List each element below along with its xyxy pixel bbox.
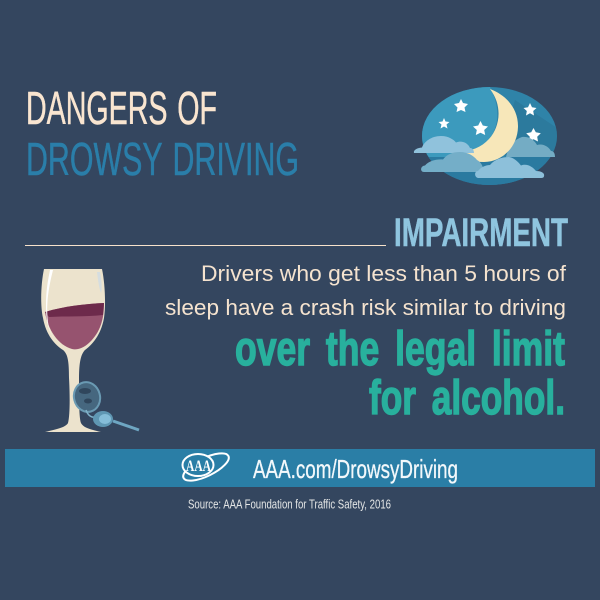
infographic canvas (5, 87, 595, 511)
icon: moon and clouds (414, 87, 562, 187)
logo: AAA (180, 448, 232, 486)
title: DROWSY DRIVING (26, 133, 299, 185)
cloud right (506, 137, 555, 157)
banner (5, 449, 595, 487)
banner url: AAA.com/DrowsyDriving (253, 454, 458, 484)
icon: car keys (71, 379, 139, 430)
cloud front (475, 157, 544, 178)
wine (45, 303, 104, 349)
text block: sleep statement: Drivers who get less than 5 hours of (201, 261, 567, 286)
title: DANGERS OF (26, 82, 217, 134)
crescent moon (453, 89, 518, 162)
night sky (422, 87, 557, 185)
icon: wine glass (41, 269, 139, 432)
title (26, 82, 299, 185)
text block: sleep statement (165, 261, 567, 320)
stars (438, 99, 541, 142)
highlight (46, 270, 54, 338)
logo: AAA: AAA (186, 458, 211, 475)
cloud left (414, 136, 474, 153)
divider line (25, 245, 386, 246)
text block: sleep statement: sleep have a crash risk similar to driving (165, 295, 566, 320)
callout: over the legal limit (235, 323, 565, 425)
source: Source: AAA Foundation for Traffic Safety, 2016 (188, 496, 391, 512)
glass (41, 269, 105, 432)
cloud middle (421, 152, 483, 172)
